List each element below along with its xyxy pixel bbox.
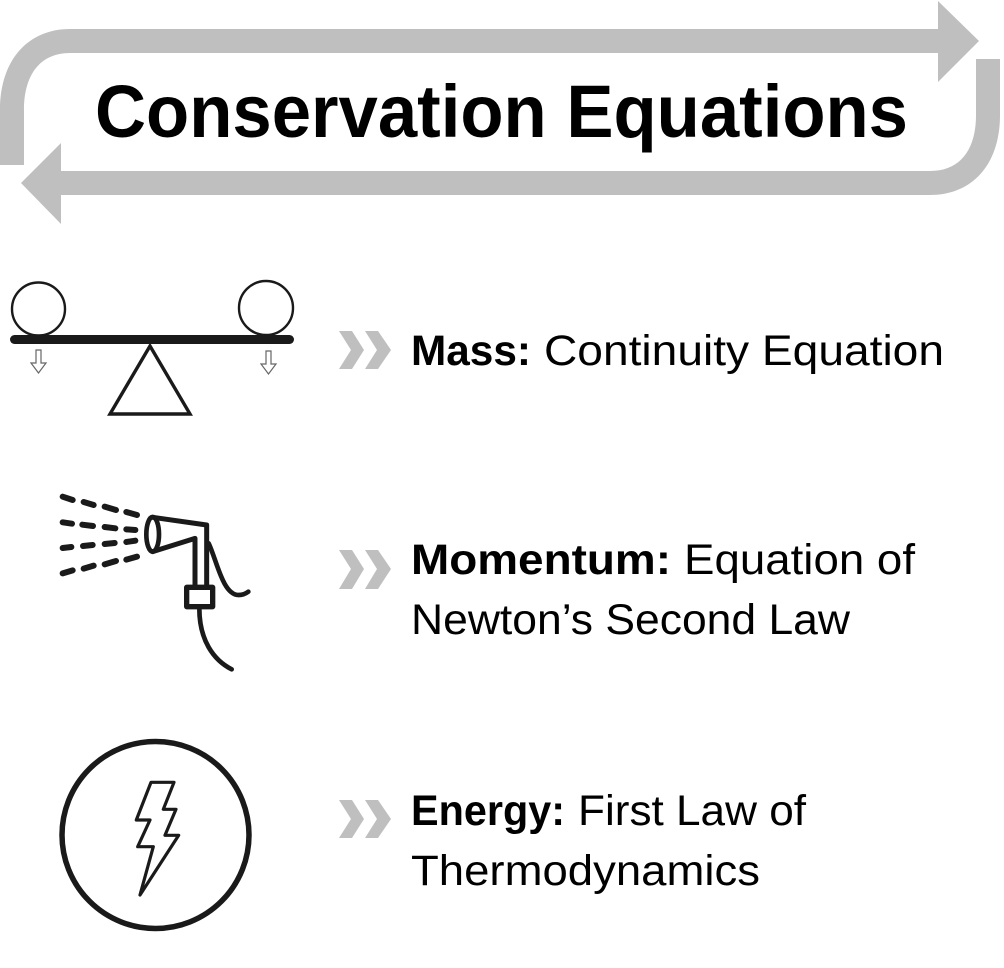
icon: seesaw balance bbox=[10, 281, 294, 414]
text: momentum bbox=[411, 536, 916, 644]
text: energy bbox=[411, 787, 807, 895]
text: mass: Continuity Equation bbox=[544, 327, 944, 375]
chevrons: energy bbox=[339, 800, 391, 838]
icon: spray nozzle bbox=[63, 497, 248, 669]
text: momentum: Momentum: bbox=[411, 536, 671, 584]
text: momentum: Newton’s Second Law bbox=[411, 596, 851, 644]
banner arrow: top, pointing right bbox=[0, 1, 979, 165]
chevrons: momentum bbox=[339, 550, 391, 589]
text: energy: Energy: bbox=[411, 787, 565, 835]
text: momentum: Equation of bbox=[684, 536, 916, 584]
text: energy: Thermodynamics bbox=[411, 847, 760, 895]
text: energy: First Law of bbox=[578, 787, 807, 835]
title: Conservation Equations bbox=[95, 70, 908, 153]
text: mass bbox=[411, 327, 944, 375]
text: mass: Mass: bbox=[411, 327, 531, 375]
banner arrow: bottom, pointing left bbox=[21, 59, 1000, 224]
chevrons: mass bbox=[339, 331, 391, 369]
icon: lightning bolt in circle bbox=[62, 742, 249, 928]
